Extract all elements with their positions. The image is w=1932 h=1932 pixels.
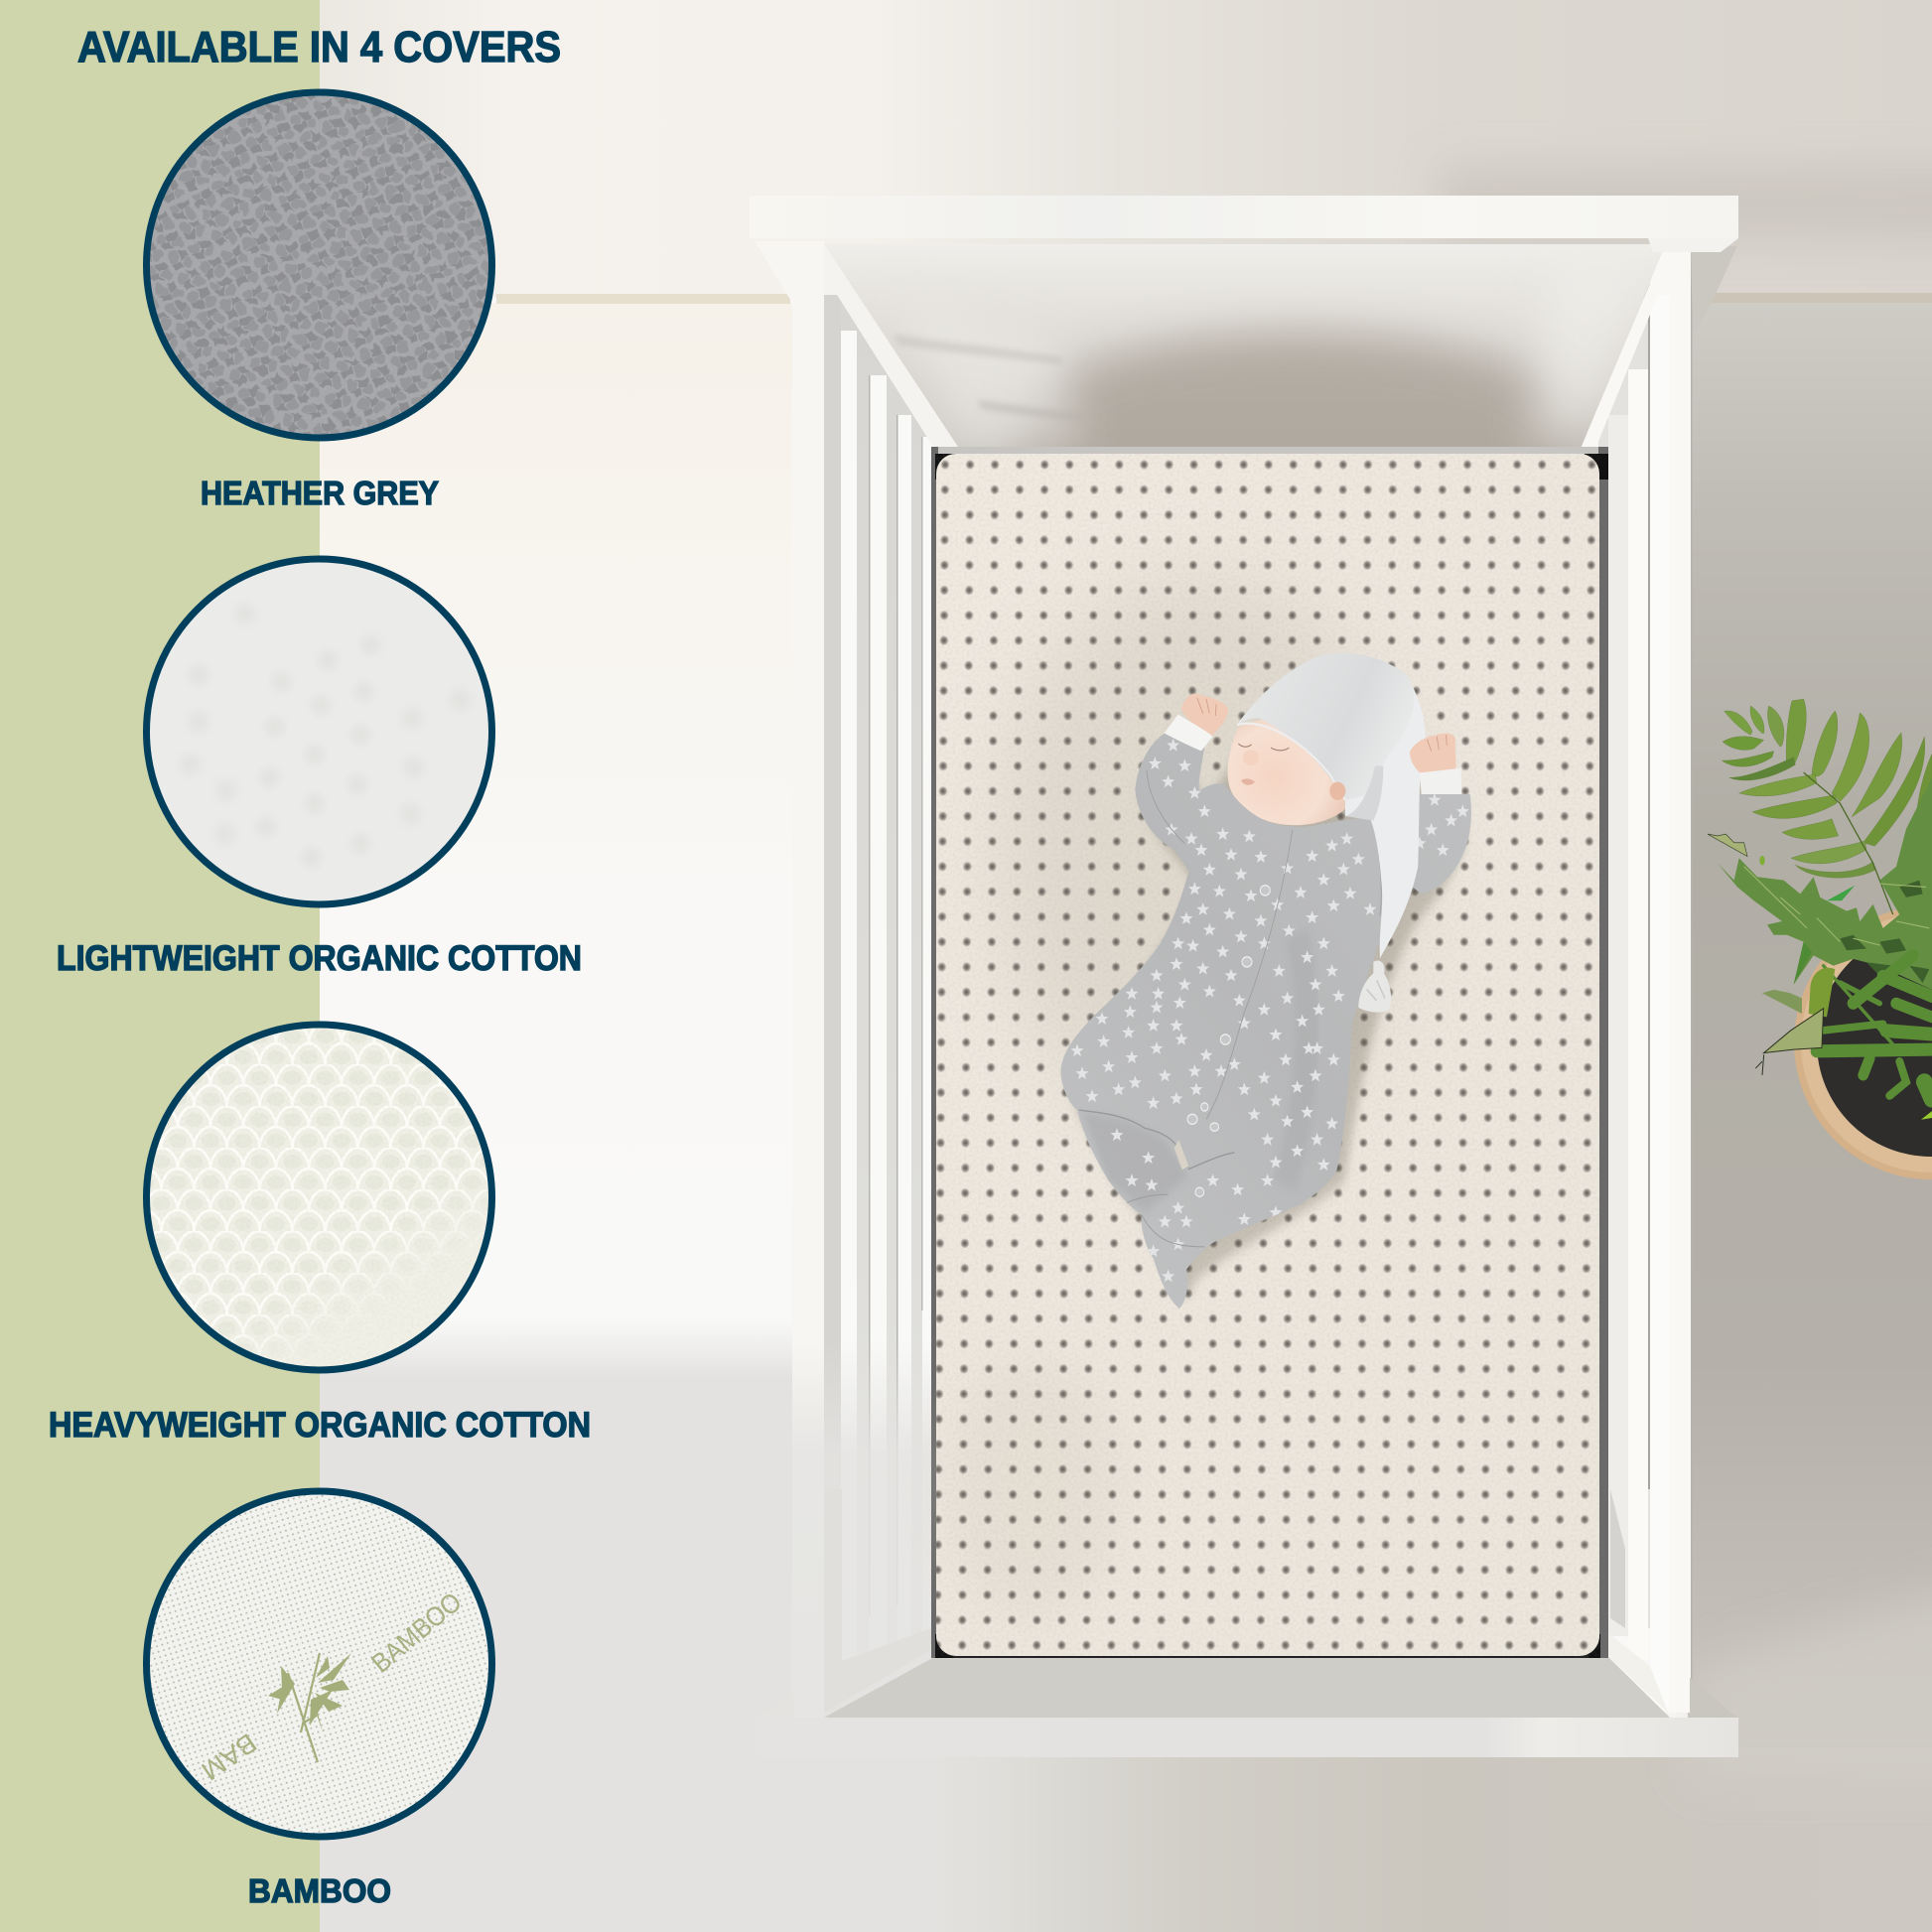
pinhole pattern	[936, 454, 1599, 1656]
frond stem	[1804, 772, 1893, 914]
mattress grain	[936, 454, 1599, 1656]
romper folds and stars	[1070, 739, 1469, 1282]
mattress shading	[943, 576, 1410, 1618]
circle: heather grey swatch	[143, 89, 495, 441]
label: bamboo: BAMBOO	[248, 1872, 391, 1909]
snap buttons	[1187, 886, 1270, 1196]
baby shadow	[1068, 667, 1465, 1296]
face	[1238, 744, 1345, 800]
head	[1228, 707, 1347, 825]
mattress surface	[936, 454, 1599, 1656]
gaps and veins in foliage	[1744, 867, 1929, 983]
right cuff	[1420, 768, 1461, 794]
right lip of top rail	[1648, 238, 1738, 252]
baby sleeping	[1060, 653, 1471, 1309]
left cuff	[1165, 715, 1213, 751]
small leaves	[1708, 834, 1932, 1120]
right hand	[1410, 734, 1455, 772]
left crib side with post and slats	[755, 241, 931, 1718]
mattress	[931, 447, 1608, 1658]
nightcap	[1237, 653, 1426, 958]
plant pot	[1794, 905, 1932, 1179]
left hand	[1181, 694, 1228, 737]
label: lightweight organic cotton: LIGHTWEIGHT ORGANIC COTTON	[57, 939, 582, 978]
romper	[1060, 733, 1471, 1309]
plant foliage	[1708, 699, 1932, 1120]
left inner diagonal band	[824, 244, 958, 447]
circle: heavyweight organic cotton swatch	[139, 1018, 501, 1380]
circle: lightweight organic cotton swatch	[139, 551, 501, 913]
icon: bamboo sprig	[268, 1653, 351, 1762]
lower foliage mass	[1718, 777, 1932, 990]
panel: green sidebar	[0, 0, 320, 1932]
woven word bamboo: BAMBOO	[366, 1587, 468, 1679]
bottom rail	[756, 1718, 1738, 1757]
mattress frame	[931, 447, 1608, 1658]
label: heather grey: HEATHER GREY	[201, 475, 439, 511]
crib end wall with shadows	[837, 244, 1662, 447]
right inner diagonal band	[1581, 246, 1669, 449]
woven word bam: BAM	[196, 1727, 262, 1786]
leaf strokes over soil	[1817, 955, 1932, 1099]
foot corner wedge	[1690, 1678, 1737, 1718]
upper fern frond	[1722, 699, 1932, 878]
label: heavyweight organic cotton: HEAVYWEIGHT ORGANIC COTTON	[49, 1406, 591, 1445]
top rail	[750, 196, 1738, 238]
heading: AVAILABLE IN 4 COVERS	[77, 23, 561, 71]
left foot corner wedge	[757, 1694, 794, 1718]
potted plant	[1708, 699, 1932, 1179]
gap between legs	[1174, 1140, 1188, 1170]
crib	[750, 196, 1738, 1757]
right crib side with post and slats	[1598, 246, 1737, 1716]
circle: bamboo swatch	[139, 1484, 501, 1847]
pom-pom	[1358, 960, 1391, 1013]
crib floor, foot end	[824, 1656, 1670, 1718]
